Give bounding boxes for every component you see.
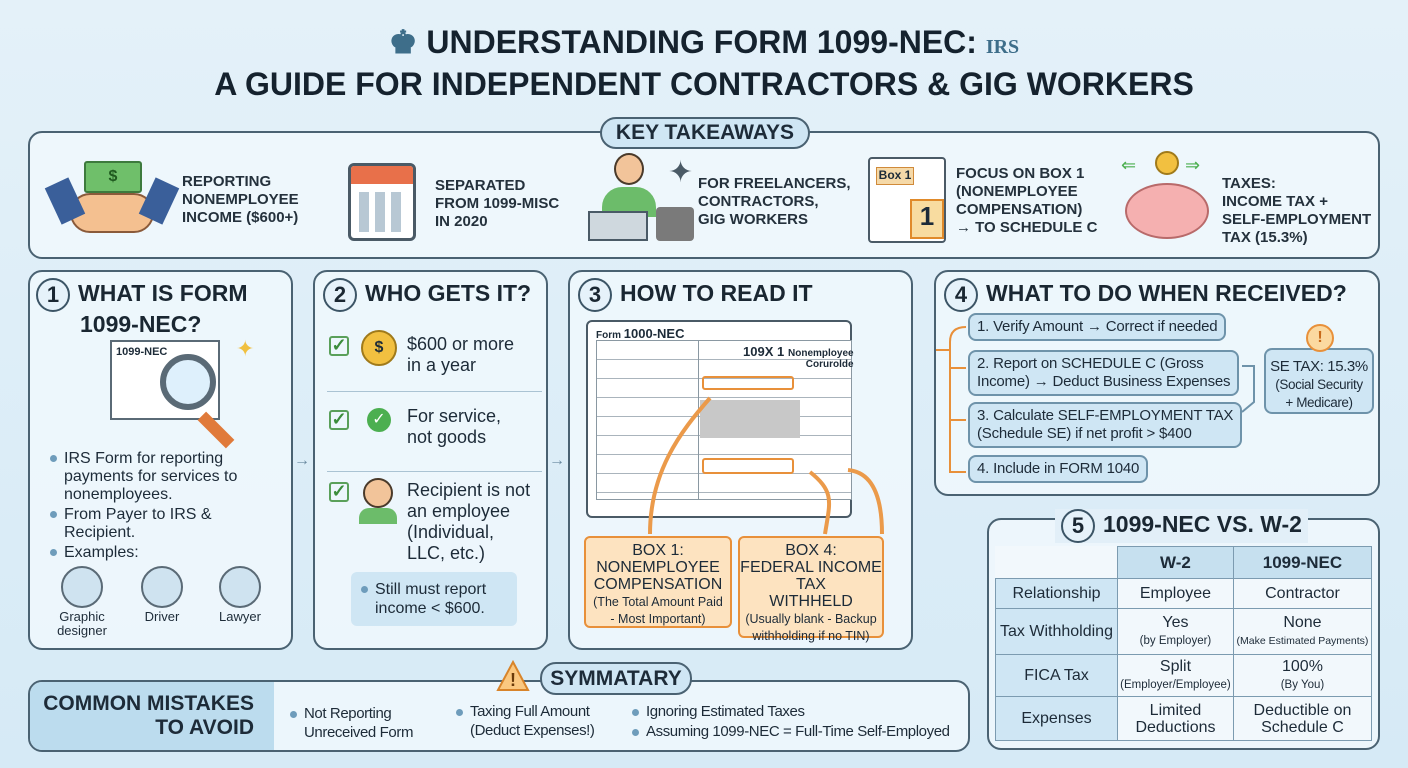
text: box 1: COMPENSATION) bbox=[956, 201, 1082, 218]
note: still must report bbox=[351, 572, 517, 626]
item recipient: LLC, etc.) bbox=[407, 543, 485, 563]
text: taxes: INCOME TAX + bbox=[1222, 193, 1328, 210]
heading 2: WHO GETS IT? bbox=[365, 280, 531, 306]
comparison table: (By You) bbox=[1281, 678, 1324, 690]
heading 3: HOW TO READ IT bbox=[620, 280, 813, 306]
comparison table: 1099-NEC bbox=[1263, 553, 1342, 572]
item 600 bbox=[327, 330, 542, 392]
icon: form with magnifier: ✦ bbox=[236, 336, 254, 361]
item 600: ✓ bbox=[331, 335, 347, 355]
callout box 1: NONEMPLOYEE bbox=[596, 559, 720, 576]
highlight box 1 bbox=[702, 376, 794, 390]
heading: common mistakes: COMMON MISTAKES bbox=[43, 692, 254, 715]
comparison table: 100% bbox=[1282, 658, 1323, 674]
panel: common mistakes: Assuming 1099-NEC = Full-Time Self-Employed bbox=[646, 723, 950, 740]
form illustration bbox=[586, 320, 852, 518]
callout box 1: COMPENSATION bbox=[594, 576, 722, 593]
panel 1: what is form bbox=[28, 270, 293, 650]
step 1 bbox=[968, 313, 1226, 341]
arrow 1 to 2: → bbox=[294, 452, 310, 469]
step 2: Income) → Deduct Business Expenses bbox=[977, 373, 1230, 390]
item service: ✓ bbox=[372, 411, 386, 428]
comparison table: (by Employer) bbox=[1140, 634, 1211, 646]
form illustration: Corurolde bbox=[806, 359, 854, 370]
comparison table: Contractor bbox=[1265, 585, 1340, 602]
heading 5 bbox=[1055, 509, 1308, 543]
icon: piggy bank bbox=[1121, 151, 1209, 239]
heading 3 bbox=[578, 278, 813, 312]
item recipient bbox=[329, 478, 530, 563]
heading: key takeaways bbox=[600, 117, 810, 149]
callout box 4: (Usually blank - Backup bbox=[745, 612, 877, 626]
icon: handshake money bbox=[44, 161, 180, 233]
arrow 2 to 3: → bbox=[549, 452, 565, 469]
callout box 4: TAX bbox=[796, 576, 826, 593]
text: description: IRS Form for reporting bbox=[64, 450, 223, 467]
heading 1 bbox=[36, 278, 248, 337]
item recipient: (Individual, bbox=[407, 522, 494, 542]
callout box 1: (The Total Amount Paid bbox=[593, 595, 723, 609]
panel 4: what to do bbox=[934, 270, 1380, 496]
step 2: 2. Report on SCHEDULE C (Gross bbox=[977, 355, 1204, 372]
panel: common mistakes: Taxing Full Amount bbox=[470, 703, 590, 720]
text: box 1: FOCUS ON BOX 1 bbox=[956, 165, 1084, 182]
mistake items bbox=[290, 704, 413, 742]
text: reporting: NONEMPLOYEE bbox=[182, 191, 299, 208]
heading: symmatary: SYMMATARY bbox=[550, 667, 682, 690]
icon: warning circle: ! bbox=[1317, 329, 1323, 346]
examples icons: Lawyer bbox=[219, 609, 261, 624]
mistake items: Unreceived Form bbox=[304, 724, 413, 741]
heading: common mistakes: TO AVOID bbox=[155, 716, 254, 739]
comparison table: Schedule C bbox=[1261, 718, 1344, 736]
comparison table: FICA Tax bbox=[1024, 667, 1089, 684]
heading 5: 1099-NEC VS. W-2 bbox=[1103, 511, 1302, 537]
icon: piggy bank: ⇒ bbox=[1185, 155, 1200, 175]
step connectors bbox=[936, 326, 1255, 473]
text: reporting bbox=[182, 173, 299, 226]
comparison table: Deductible on bbox=[1254, 702, 1351, 718]
callout box 1: BOX 1: bbox=[632, 542, 684, 559]
comparison table: None bbox=[1283, 614, 1322, 630]
heading 1: 1099-NEC? bbox=[80, 311, 201, 337]
step 3: (Schedule SE) if net profit > $400 bbox=[977, 425, 1192, 442]
note: still must report: Still must report bbox=[375, 581, 486, 598]
item 600: $ bbox=[375, 339, 383, 356]
highlight box 4 bbox=[702, 458, 794, 474]
icon: form with magnifier: 1099-NEC bbox=[116, 346, 167, 358]
panel 3: how to read it bbox=[568, 270, 913, 650]
comparison table: Tax Withholding bbox=[1000, 623, 1113, 640]
panel: key takeaways bbox=[28, 131, 1380, 259]
step 2 bbox=[968, 350, 1239, 396]
text: freelancers: CONTRACTORS, bbox=[698, 193, 819, 210]
text: description: Recipient. bbox=[64, 524, 135, 541]
heading 1: WHAT IS FORM bbox=[78, 280, 248, 306]
text: description: From Payer to IRS & bbox=[64, 506, 212, 523]
item 600: in a year bbox=[407, 355, 476, 375]
callout box 4: withholding if no TIN) bbox=[752, 629, 870, 643]
icon: calendar bbox=[348, 163, 416, 241]
icon: piggy bank: ⇐ bbox=[1121, 155, 1136, 175]
icon: box 1 document: Box 1 bbox=[879, 168, 911, 182]
title bbox=[214, 24, 1194, 102]
callout box 4: BOX 4: bbox=[785, 542, 837, 559]
icon: box 1 document bbox=[868, 157, 946, 243]
step 4 bbox=[968, 455, 1148, 483]
form illustration: 109X 1 bbox=[743, 344, 784, 359]
heading 1: 1 bbox=[47, 282, 59, 307]
text: separated bbox=[435, 177, 559, 230]
item recipient: an employee bbox=[407, 501, 510, 521]
heading: common mistakes bbox=[30, 682, 274, 750]
examples icons: Graphic bbox=[59, 609, 105, 624]
heading 4: 4 bbox=[955, 282, 967, 307]
text: box 1: (NONEMPLOYEE bbox=[956, 183, 1078, 200]
comparison table: Relationship bbox=[1012, 585, 1101, 602]
form illustration: Form 1000-NEC bbox=[596, 326, 684, 341]
comparison table bbox=[995, 546, 1372, 741]
text: taxes: SELF-EMPLOYMENT bbox=[1222, 211, 1371, 228]
item recipient: Recipient is not bbox=[407, 480, 530, 500]
step 4: 4. Include in FORM 1040 bbox=[977, 460, 1139, 477]
comparison table: (Employer/Employee) bbox=[1120, 678, 1231, 690]
text: separated: IN 2020 bbox=[435, 213, 488, 230]
item recipient: ✓ bbox=[331, 481, 347, 501]
text: freelancers bbox=[698, 175, 851, 228]
text: description: payments for services to bbox=[64, 468, 237, 485]
comparison table: Yes bbox=[1162, 614, 1189, 630]
note: still must report: income < $600. bbox=[375, 600, 485, 617]
item service bbox=[327, 406, 542, 472]
callout box 1 bbox=[584, 536, 732, 628]
title: ♚ UNDERSTANDING FORM 1099-NEC: IRS bbox=[389, 24, 1019, 60]
heading 5: 5 bbox=[1072, 513, 1084, 538]
icon: handshake money: $ bbox=[109, 168, 117, 185]
heading: symmatary bbox=[540, 662, 692, 695]
icon: warning triangle bbox=[496, 660, 530, 691]
heading 3: 3 bbox=[589, 282, 601, 307]
item service: For service, bbox=[407, 406, 501, 426]
text: freelancers: GIG WORKERS bbox=[698, 211, 808, 228]
item service: ✓ bbox=[331, 409, 347, 429]
icon: freelancer bbox=[588, 153, 694, 241]
icon: box 1 document: 1 bbox=[920, 201, 934, 231]
text: separated: FROM 1099-MISC bbox=[435, 195, 559, 212]
panel: common mistakes: Ignoring Estimated Taxes bbox=[646, 703, 805, 720]
title: A GUIDE FOR INDEPENDENT CONTRACTORS & GIG WORKERS bbox=[214, 66, 1194, 102]
comparison table: Split bbox=[1160, 658, 1191, 674]
callout: se tax: (Social Security bbox=[1275, 377, 1363, 392]
comparison table: (Make Estimated Payments) bbox=[1237, 634, 1368, 646]
text: box 1 bbox=[956, 165, 1097, 236]
text: freelancers: FOR FREELANCERS, bbox=[698, 175, 851, 192]
panel: common mistakes bbox=[28, 680, 970, 752]
icon: warning circle bbox=[1306, 324, 1334, 352]
form illustration: Nonemployee bbox=[788, 348, 854, 359]
text: description: nonemployees. bbox=[64, 486, 173, 503]
text: box 1: → TO SCHEDULE C bbox=[956, 219, 1097, 236]
panel 2: who gets it bbox=[313, 270, 548, 650]
heading 2: 2 bbox=[334, 282, 346, 307]
heading 2 bbox=[323, 278, 531, 312]
mistake items: Not Reporting bbox=[304, 705, 391, 722]
icon: freelancer: ✦ bbox=[668, 156, 693, 189]
callout: se tax: + Medicare) bbox=[1285, 395, 1353, 410]
callout box 4: FEDERAL INCOME bbox=[740, 559, 882, 576]
comparison table: Employee bbox=[1140, 585, 1211, 602]
heading 4 bbox=[944, 278, 1347, 312]
panel: common mistakes: (Deduct Expenses!) bbox=[470, 722, 595, 739]
callout: se tax: SE TAX: 15.3% bbox=[1270, 358, 1368, 375]
comparison table: Expenses bbox=[1021, 710, 1092, 727]
step 3: 3. Calculate SELF-EMPLOYMENT TAX bbox=[977, 407, 1233, 424]
comparison table: Limited bbox=[1150, 702, 1201, 718]
text: reporting: INCOME ($600+) bbox=[182, 209, 298, 226]
text: separated: SEPARATED bbox=[435, 177, 525, 194]
callout box 1: - Most Important) bbox=[610, 612, 706, 626]
icon: warning triangle: ! bbox=[510, 670, 516, 690]
heading: key takeaways: KEY TAKEAWAYS bbox=[616, 121, 794, 144]
text: description: Examples: bbox=[64, 544, 139, 561]
step 3 bbox=[968, 402, 1242, 448]
step 1: 1. Verify Amount → Correct if needed bbox=[977, 318, 1217, 335]
heading 4: WHAT TO DO WHEN RECEIVED? bbox=[986, 280, 1347, 306]
panel 5: comparison bbox=[987, 518, 1380, 750]
text: taxes: TAX (15.3%) bbox=[1222, 229, 1308, 246]
comparison table: Deductions bbox=[1135, 718, 1215, 736]
item service: not goods bbox=[407, 427, 486, 447]
comparison table: W-2 bbox=[1160, 553, 1191, 572]
callout box 4 bbox=[738, 536, 884, 638]
text: description bbox=[50, 450, 237, 561]
examples icons: designer bbox=[57, 623, 107, 638]
callout box 4: WITHHELD bbox=[769, 593, 853, 610]
text: reporting: REPORTING bbox=[182, 173, 271, 190]
arrows: orange bbox=[648, 396, 884, 534]
text: taxes: TAXES: bbox=[1222, 175, 1276, 192]
text: taxes bbox=[1222, 175, 1371, 246]
item 600: $600 or more bbox=[407, 334, 514, 354]
callout: se tax bbox=[1264, 348, 1374, 414]
examples icons: Driver bbox=[145, 609, 179, 624]
icon: form with magnifier bbox=[110, 336, 254, 448]
examples icons bbox=[57, 566, 261, 638]
